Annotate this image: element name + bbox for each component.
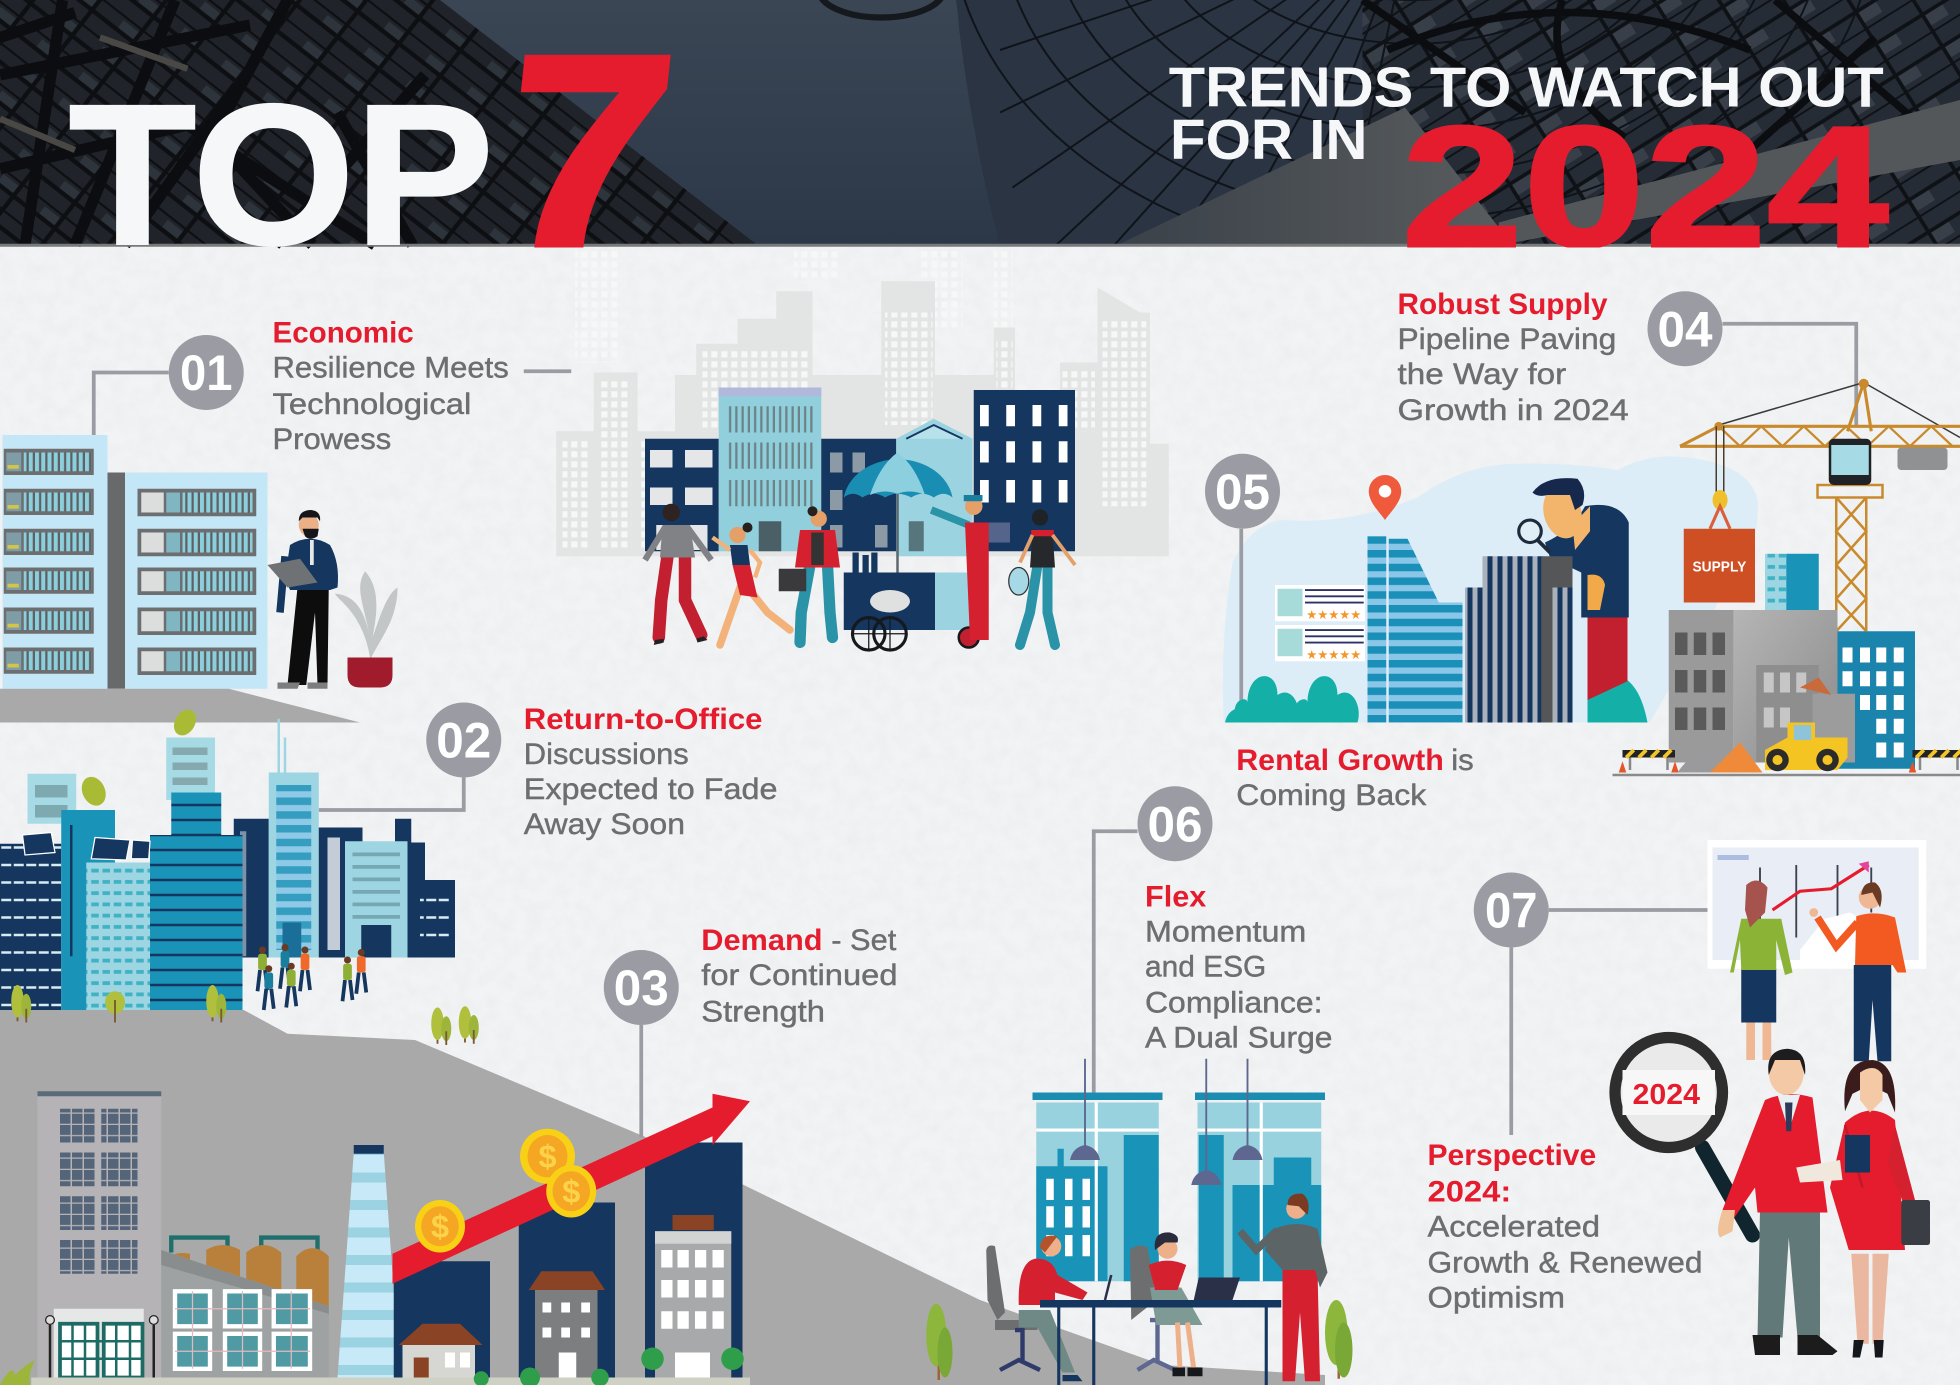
illustration: tall office block — [38, 1091, 161, 1380]
illustration: magnifier with 2024: 2024 — [1632, 1079, 1700, 1111]
connector 02 — [319, 778, 464, 810]
gold coins: $ — [431, 1208, 449, 1244]
illustration: magnifier with 2024 — [1615, 1038, 1752, 1235]
illustration: food cart and umbrella — [844, 452, 979, 650]
text 05 — [1236, 744, 1474, 812]
illustration: businesswoman in red dress — [1796, 1060, 1930, 1358]
icon: rating cards — [1275, 585, 1365, 662]
illustration: woman at board — [1730, 881, 1792, 1060]
text 06: Flex — [1145, 880, 1207, 913]
text 06 — [1145, 880, 1332, 1054]
tree near office — [1325, 1300, 1352, 1379]
illustration: potted plant — [335, 571, 398, 688]
illustration: businessman in red jacket — [1718, 1049, 1838, 1355]
supply crate: SUPPLY — [1692, 559, 1747, 575]
illustration: green city — [0, 706, 455, 1010]
text 01 — [272, 316, 509, 456]
text 03: Demand — [701, 924, 822, 957]
badge 04: 04 — [1658, 301, 1713, 357]
illustration: high-rise — [641, 1215, 744, 1378]
illustration: office workers at desk — [986, 1194, 1328, 1385]
text 03: Strength — [701, 995, 825, 1028]
illustration: businessman with tablet — [268, 510, 338, 689]
gold coins: $ — [538, 1138, 557, 1174]
text 02: Expected to Fade — [524, 773, 778, 806]
illustration: server-style office building — [0, 435, 360, 722]
trees — [11, 985, 479, 1045]
badge 06 — [1138, 786, 1212, 861]
illustration: pale blue cloud backdrop — [1223, 456, 1758, 722]
badge 01 — [169, 335, 244, 410]
badge 05: 05 — [1215, 464, 1270, 520]
text 03 — [701, 924, 898, 1028]
illustration: office windows — [1032, 1092, 1325, 1281]
text 04: Robust Supply — [1398, 288, 1608, 321]
text 04: Growth in 2024 — [1398, 394, 1629, 427]
badge 01: 01 — [180, 345, 232, 401]
text 07 — [1428, 1139, 1702, 1315]
illustration: striped tower — [1368, 536, 1462, 722]
badge 03 — [604, 950, 679, 1025]
title: trends to watch out for in 2024: TRENDS TO WATCH OUT — [1169, 55, 1884, 118]
text 02 — [524, 703, 778, 841]
illustration: small house — [399, 1324, 482, 1378]
text 02: Away Soon — [524, 808, 685, 841]
text 07: 2024: — [1428, 1175, 1511, 1208]
grey hillside — [0, 1010, 1325, 1385]
badge 03: 03 — [614, 960, 669, 1016]
text 07: Perspective — [1428, 1139, 1596, 1172]
connector 01 — [94, 371, 571, 435]
illustration: construction barriers — [1619, 750, 1960, 772]
text 05: is — [1451, 744, 1474, 777]
illustration: man at board — [1809, 882, 1906, 1061]
badge 07 — [1474, 872, 1549, 948]
illustration: hanging lamps — [1070, 1059, 1262, 1185]
illustration: colourful street buildings — [645, 388, 1075, 556]
illustration: factory — [161, 1238, 329, 1378]
illustration: striped chimney — [338, 1145, 400, 1378]
text 01: Resilience Meets — [272, 352, 509, 385]
text 02: Discussions — [524, 738, 689, 771]
icon: rating cards: ★★★★★ — [1306, 608, 1361, 622]
badge 06: 06 — [1148, 796, 1202, 852]
illustration: walking people — [645, 495, 1075, 645]
text 06: and ESG — [1145, 950, 1266, 983]
supply crate — [1684, 529, 1755, 602]
badge 07: 07 — [1485, 882, 1538, 938]
rising navy bars — [394, 1142, 742, 1378]
text 02: Return-to-Office — [524, 703, 762, 736]
illustration: dark striped office blocks — [1465, 556, 1572, 722]
text 04 — [1398, 288, 1629, 427]
title: TOP 7 — [70, 54, 671, 248]
text 01: Prowess — [272, 423, 391, 456]
title: trends to watch out for in 2024 — [1169, 67, 1890, 248]
location pin centre dot — [1379, 485, 1391, 498]
title: trends to watch out for in 2024: FOR IN — [1170, 108, 1368, 171]
connector 05 — [1240, 529, 1243, 712]
badge 02: 02 — [436, 712, 491, 768]
badge 04 — [1648, 291, 1722, 366]
illustration: construction buildings — [1612, 554, 1960, 775]
title: TOP 7: 7 — [489, 0, 686, 308]
text 01: Technological — [272, 388, 471, 421]
illustration: small commuters — [258, 944, 366, 1010]
illustration: mid-rise — [529, 1271, 605, 1378]
text 07: Optimism — [1428, 1282, 1565, 1315]
ground strip and shrubs — [0, 1360, 750, 1385]
illustration: man with magnifying glass — [1519, 478, 1629, 700]
connector 06 — [1094, 831, 1138, 1100]
icon: location pin — [1369, 475, 1401, 520]
text 03: for Continued — [701, 959, 898, 992]
text 06: A Dual Surge — [1145, 1022, 1332, 1055]
text 05: Rental Growth — [1236, 744, 1444, 777]
badge 05 — [1205, 454, 1280, 529]
connector 07 — [1511, 910, 1708, 1135]
text 04: the Way for — [1398, 358, 1566, 391]
badge 02 — [426, 702, 501, 778]
text 07: Accelerated — [1428, 1210, 1600, 1243]
connector 03 — [640, 1025, 643, 1138]
text 05: Coming Back — [1236, 779, 1427, 812]
illustration: teal bushes — [1225, 645, 1648, 722]
connector 04 — [1722, 324, 1856, 425]
text 06: Momentum — [1145, 915, 1306, 948]
presentation board with chart — [1708, 840, 1926, 969]
text 07: Growth & Renewed — [1428, 1247, 1702, 1280]
text 06: Compliance: — [1145, 987, 1322, 1020]
illustration: grey city skyline — [556, 250, 1169, 556]
gold coins: $ — [562, 1173, 580, 1209]
illustration: sand pile and bulldozer — [1678, 722, 1848, 772]
illustration: tower crane — [1680, 379, 1960, 631]
tree near slope — [926, 1304, 952, 1380]
title: trends to watch out for in 2024: 2024 — [1401, 90, 1889, 283]
text 01: Economic — [272, 316, 414, 349]
header banner — [0, 0, 1960, 275]
icon: rating cards: ★★★★★ — [1306, 648, 1361, 662]
growth arrow — [392, 1094, 750, 1284]
text 03: - Set — [831, 924, 897, 957]
gold coins — [415, 1129, 596, 1252]
title: TOP 7: TOP — [69, 64, 494, 287]
text 04: Pipeline Paving — [1398, 323, 1616, 356]
